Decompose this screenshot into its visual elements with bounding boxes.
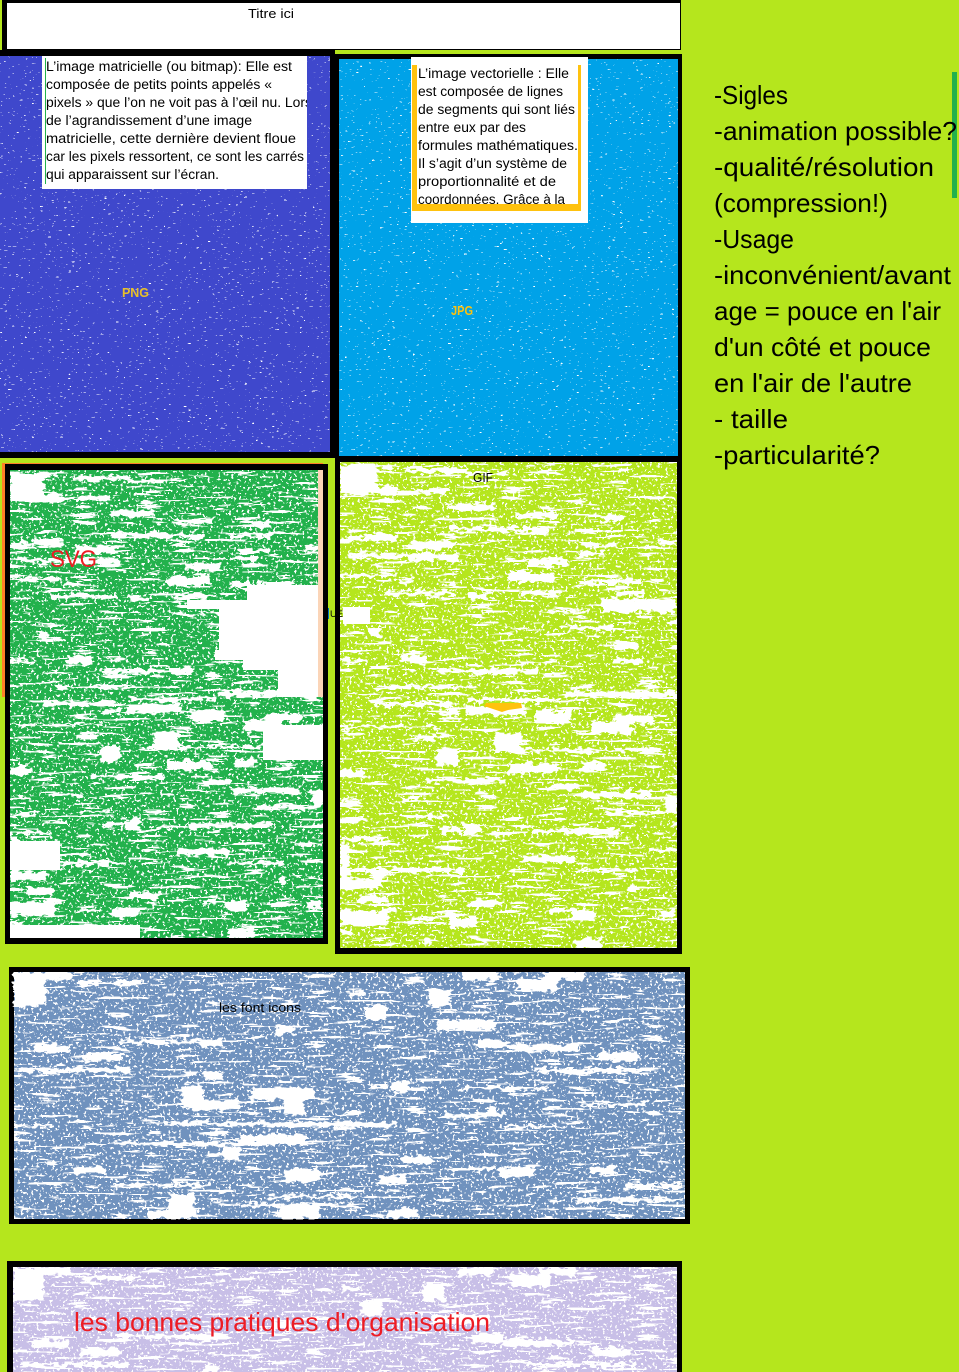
text block: image matricielle: matricielle, cette dernière devient floue [46, 131, 296, 146]
heading: bonnes pratiques: les bonnes pratiques d'organisation [74, 1307, 490, 1337]
stray label fragment: UE [330, 609, 343, 619]
panel: GIF [335, 460, 682, 954]
text block: criteria list: - taille [714, 404, 788, 434]
label: JPG: JPG [451, 303, 473, 318]
text block: image matricielle: car les pixels ressortent, ce sont les carrés [46, 149, 304, 164]
text block: criteria list: -animation possible? [714, 116, 957, 146]
orange blotch [484, 703, 522, 712]
text block: criteria list: -particularité? [714, 440, 880, 470]
title box [2, 0, 681, 50]
label: GIF: GIF [473, 470, 493, 485]
text block: criteria list [714, 80, 957, 470]
panel: PNG [0, 50, 335, 458]
text block: image vectorielle: est composée de lignes [418, 84, 563, 99]
text block: image vectorielle [411, 57, 588, 223]
text block: image vectorielle: Il s’agit d’un système de [418, 156, 567, 171]
text block: image vectorielle: de segments qui sont liés [418, 102, 575, 117]
text block: image vectorielle: coordonnées. Grâce à la [418, 192, 565, 207]
text block: criteria list: d'un côté et pouce [714, 332, 931, 362]
panel: SVG [2, 463, 328, 944]
text block: criteria list: age = pouce en l'air [714, 296, 941, 326]
text block: criteria list: -Usage [714, 224, 794, 254]
text block: criteria list: en l'air de l'autre [714, 368, 912, 398]
text block: image matricielle [42, 56, 312, 189]
text block: criteria list: -inconvénient/avant [714, 260, 952, 290]
white patch [343, 607, 370, 624]
text block: image vectorielle: formules mathématiques. [418, 138, 578, 153]
label: SVG: SVG [50, 546, 97, 573]
label: PNG: PNG [122, 285, 149, 300]
text block: image vectorielle: proportionnalité et de [418, 174, 556, 189]
text block: image matricielle: pixels » que l’on ne voit pas à l’œil nu. Lors [46, 95, 312, 110]
panel: JPG [335, 54, 682, 460]
text block: criteria list: -Sigles [714, 80, 788, 110]
text block: criteria list: (compression!) [714, 188, 888, 218]
panel: bonnes pratiques [7, 1261, 682, 1372]
panel: font icons [9, 967, 690, 1224]
green stripe [952, 72, 957, 198]
text block: image vectorielle: entre eux par des [418, 120, 526, 135]
text block: image matricielle: L’image matricielle (ou bitmap): Elle est [46, 59, 292, 74]
text block: image vectorielle: L’image vectorielle : Elle [418, 66, 569, 81]
text block: image matricielle: qui apparaissent sur l’écran. [46, 167, 219, 182]
title: Titre ici [248, 6, 294, 21]
text block: image matricielle: composée de petits points appelés « [46, 77, 272, 92]
label: les font icons: les font icons [219, 1000, 302, 1015]
text block: image matricielle: de l’agrandissement d’une image [46, 113, 252, 128]
text block: criteria list: -qualité/résolution [714, 152, 934, 182]
